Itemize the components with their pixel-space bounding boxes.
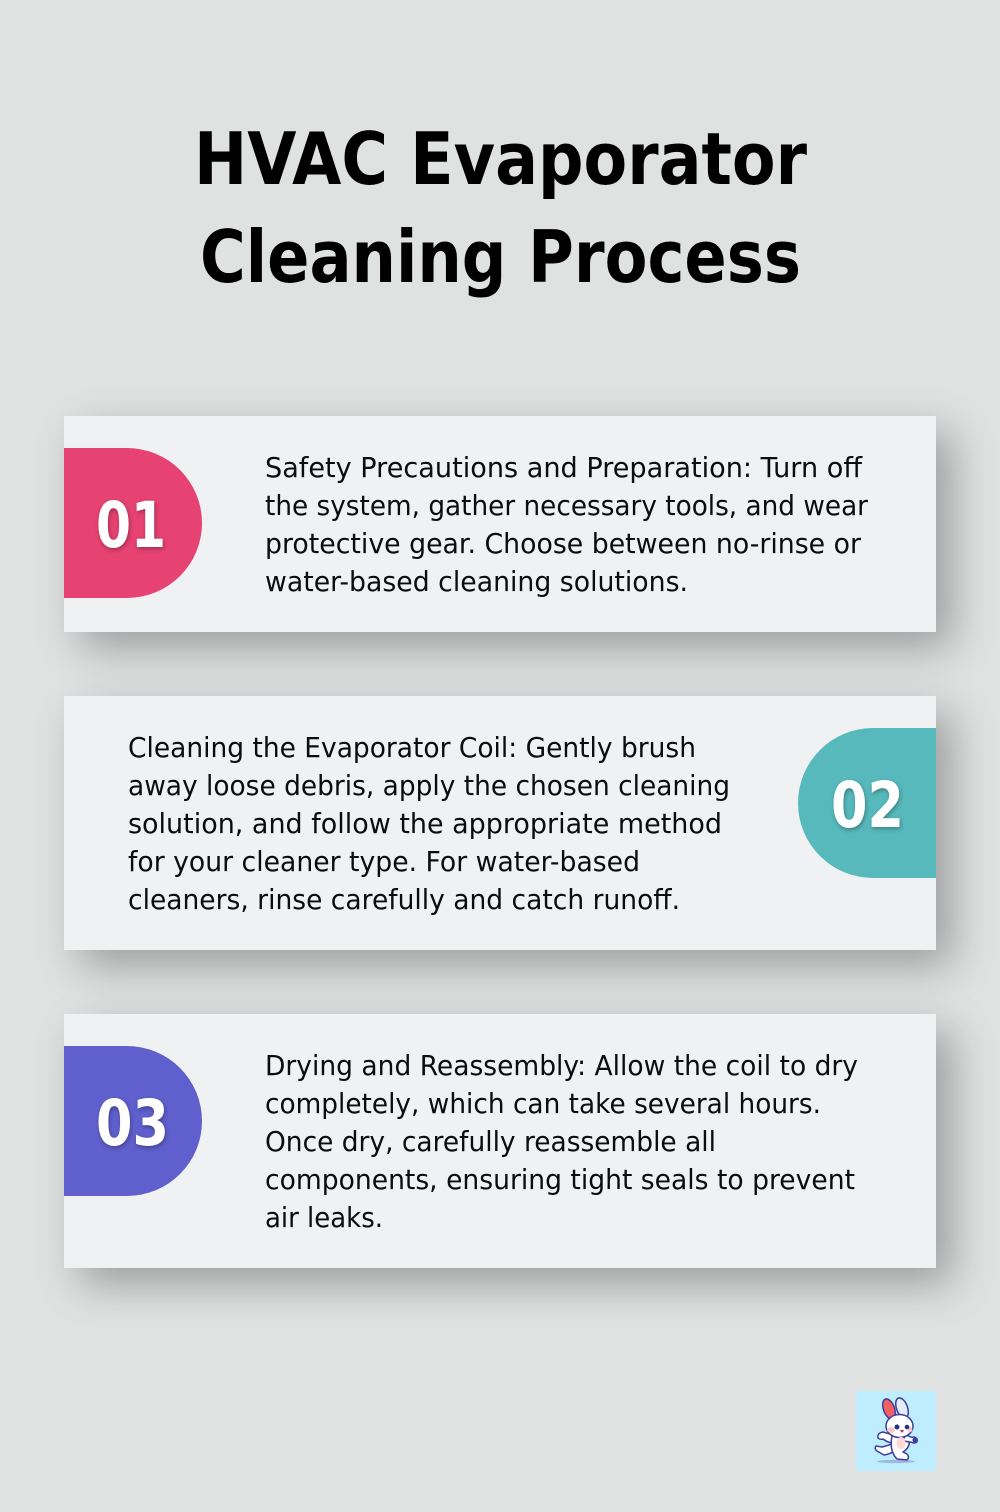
- text: step 2 description: away loose debris, apply the chosen cleaning: [128, 770, 730, 802]
- panel: step 2: [64, 696, 936, 950]
- text: step 1 description: Safety Precautions and Preparation: Turn off: [265, 452, 863, 484]
- badge: 03: [64, 1046, 202, 1196]
- text: step 1 description: protective gear. Choose between no-rinse or: [265, 528, 862, 560]
- text: step 2 description: [128, 732, 730, 916]
- text: step 3 description: Once dry, carefully reassemble all: [265, 1126, 716, 1158]
- badge: 03: 03: [96, 1087, 169, 1160]
- text: step 1 description: the system, gather necessary tools, and wear: [265, 490, 869, 522]
- title: HVAC Evaporator: [194, 117, 807, 201]
- badge: 01: [64, 448, 202, 598]
- panel: step 1: [64, 416, 936, 632]
- text: step 3 description: [265, 1050, 858, 1234]
- text: step 1 description: water-based cleaning solutions.: [265, 566, 688, 598]
- panel: step 3: [64, 1014, 936, 1268]
- text: step 3 description: completely, which can take several hours.: [265, 1088, 821, 1120]
- icon: running bunny logo: [856, 1391, 936, 1471]
- text: step 2 description: Cleaning the Evaporator Coil: Gently brush: [128, 732, 696, 764]
- text: step 2 description: for your cleaner type. For water-based: [128, 846, 640, 878]
- text: step 2 description: solution, and follow the appropriate method: [128, 808, 722, 840]
- badge: 02: [798, 728, 936, 878]
- text: step 3 description: air leaks.: [265, 1202, 383, 1234]
- badge: 01: 01: [96, 489, 166, 562]
- text: step 3 description: components, ensuring tight seals to prevent: [265, 1164, 855, 1196]
- title: Cleaning Process: [200, 215, 801, 299]
- text: step 2 description: cleaners, rinse carefully and catch runoff.: [128, 884, 680, 916]
- title: [194, 117, 807, 299]
- text: step 1 description: [265, 452, 869, 598]
- badge: 02: 02: [831, 769, 904, 842]
- text: step 3 description: Drying and Reassembly: Allow the coil to dry: [265, 1050, 858, 1082]
